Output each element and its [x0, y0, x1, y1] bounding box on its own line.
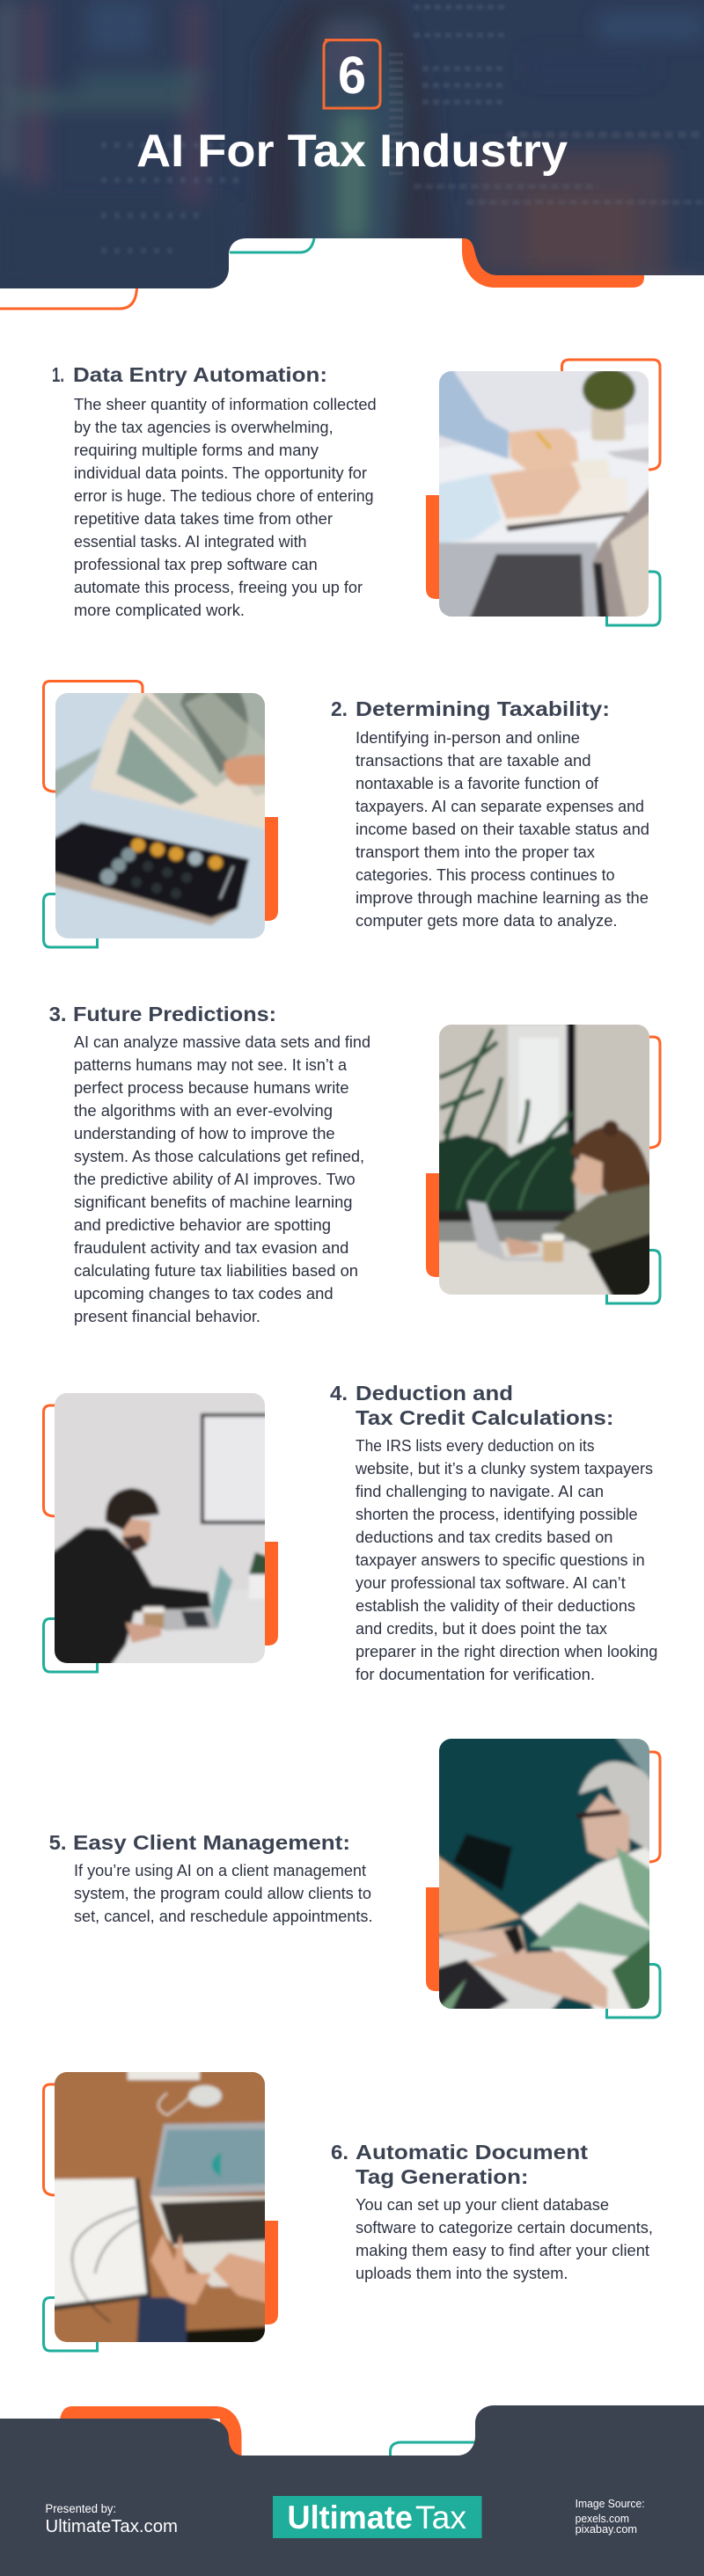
heading 5: 5. — [49, 1831, 67, 1854]
body text 2: computer gets more data to analyze. — [356, 912, 618, 930]
body text 5 — [74, 1862, 373, 1925]
heading 6: 6. — [331, 2141, 348, 2164]
frame: orange bar — [265, 2221, 278, 2324]
photo: older woman typing — [439, 1739, 649, 2009]
body text 3: patterns humans may not see. It isn’t a — [74, 1056, 348, 1074]
body text 2: taxpayers. AI can separate expenses and — [356, 798, 644, 815]
footer — [0, 2405, 704, 2576]
body text 1: The sheer quantity of information collected — [74, 396, 377, 413]
panel: 6 automatic document tag generation — [44, 2064, 653, 2351]
body text 6: uploads them into the system. — [356, 2265, 568, 2282]
body text 1: more complicated work. — [74, 602, 245, 619]
body text 1: essential tasks. AI integrated with — [74, 533, 306, 551]
image source: pexels.com — [576, 2512, 629, 2525]
photo: laptop on wooden desk — [55, 2072, 265, 2342]
body text 4: your professional tax software. AI can’t — [356, 1574, 626, 1592]
frame: teal outline — [44, 2297, 97, 2351]
body text 1: by the tax agencies is overwhelming, — [74, 419, 334, 436]
heading 2: 2. — [331, 697, 348, 720]
body text 4: shorten the process, identifying possible — [356, 1506, 637, 1523]
heading 3: Future Predictions: — [73, 1003, 276, 1025]
body text 3: calculating future tax liabilities based on — [74, 1262, 358, 1280]
panel: 1 data entry automation — [52, 360, 660, 625]
frame: orange bar — [426, 495, 439, 599]
frame: orange bar — [265, 817, 278, 921]
body text 3 — [74, 1033, 370, 1325]
body text 2: transport them into the proper tax — [356, 843, 595, 861]
body text 6: You can set up your client database — [356, 2196, 609, 2214]
panel: 2 determining taxability — [44, 673, 649, 947]
image source: Image Source: — [576, 2497, 645, 2510]
heading 6 — [331, 2141, 588, 2188]
frame: orange outline — [561, 360, 660, 470]
frame: orange outline — [44, 2084, 55, 2195]
body text 2 — [356, 729, 649, 930]
header banner — [0, 0, 704, 309]
heading 4: Deduction and — [356, 1382, 513, 1405]
photo: hands writing at laptop — [439, 371, 649, 617]
photo: cash and calculator phone — [55, 693, 265, 938]
logo: UltimateTax: Tax — [415, 2499, 467, 2536]
accent: teal line — [230, 238, 314, 252]
badge: number 6 — [324, 40, 380, 108]
panel: 5 easy client management — [49, 1731, 660, 2018]
body text 6: software to categorize certain documents, — [356, 2219, 653, 2237]
body text 3: understanding of how to improve the — [74, 1125, 335, 1142]
heading 2: Determining Taxability: — [356, 697, 610, 720]
body text 3: fraudulent activity and tax evasion and — [74, 1239, 348, 1257]
body text 4: preparer in the right direction when looking — [356, 1643, 657, 1660]
frame: orange outline — [649, 1037, 660, 1148]
body text 2: categories. This process continues to — [356, 866, 614, 884]
body text 1 — [74, 396, 377, 619]
frame: orange bar — [426, 1887, 439, 1991]
body text 4: taxpayer answers to specific questions in — [356, 1551, 645, 1569]
body text 3: system. As those calculations get refined, — [74, 1148, 364, 1165]
body text 4: The IRS lists every deduction on its — [356, 1437, 595, 1455]
frame: orange outline — [44, 1405, 55, 1516]
header background photo — [0, 0, 704, 299]
presented by: UltimateTax.com — [46, 2517, 178, 2536]
presented by — [46, 2502, 178, 2536]
body text 5: If you’re using AI on a client management — [74, 1862, 366, 1879]
body text 1: error is huge. The tedious chore of entering — [74, 487, 373, 505]
footer accent: teal line — [391, 2442, 480, 2457]
body text 1: requiring multiple forms and many — [74, 441, 319, 459]
body text 4: website, but it’s a clunky system taxpayers — [355, 1460, 653, 1478]
frame: teal outline — [44, 894, 97, 947]
body text 5: system, the program could allow clients to — [74, 1885, 371, 1902]
heading 6: Automatic Document — [356, 2141, 588, 2164]
frame: orange outline — [44, 681, 143, 792]
body text 2: income based on their taxable status and — [356, 821, 649, 838]
heading 3: 3. — [49, 1003, 67, 1025]
panel: 3 future predictions — [49, 1003, 660, 1325]
body text 1: professional tax prep software can — [74, 556, 318, 573]
body text 4: deductions and tax credits based on — [356, 1529, 612, 1546]
image source: pixabay.com — [576, 2522, 637, 2536]
heading 4: 4. — [330, 1382, 348, 1405]
body text 2: improve through machine learning as the — [356, 889, 649, 907]
body text 2: Identifying in-person and online — [356, 729, 580, 747]
body text 4: find challenging to navigate. AI can — [356, 1483, 604, 1500]
body text 4: establish the validity of their deductions — [356, 1597, 635, 1615]
panel: 4 deduction and tax credit — [44, 1382, 657, 1683]
body text 3: AI can analyze massive data sets and find — [74, 1033, 370, 1051]
body text 3: the predictive ability of AI improves. Two — [74, 1171, 356, 1188]
frame: teal outline — [44, 1618, 97, 1672]
body text 4 — [355, 1437, 657, 1683]
image source — [576, 2497, 645, 2536]
body text 3: present financial behavior. — [74, 1308, 260, 1325]
frame: orange bar — [426, 1173, 439, 1277]
frame: teal outline — [607, 1251, 660, 1303]
presented by: Presented by: — [46, 2502, 116, 2515]
heading 4 — [330, 1382, 614, 1429]
body text 6 — [356, 2196, 653, 2282]
body text 3: significant benefits of machine learning — [74, 1193, 352, 1211]
frame: teal outline — [607, 572, 660, 625]
body text 1: repetitive data takes time from other — [74, 510, 333, 528]
footer accent: orange tab — [60, 2406, 241, 2458]
logo: UltimateTax — [273, 2496, 482, 2538]
photo: woman working at desk — [439, 1025, 649, 1295]
heading 5: Easy Client Management: — [73, 1831, 350, 1854]
body text 2: nontaxable is a favorite function of — [356, 775, 599, 792]
accent: orange line — [0, 288, 137, 309]
frame: teal outline — [607, 1965, 660, 2018]
body text 1: individual data points. The opportunity for — [74, 464, 367, 482]
body text 3: the algorithms with an ever-evolving — [74, 1102, 333, 1120]
heading 4: Tax Credit Calculations: — [356, 1406, 614, 1429]
logo: UltimateTax: Ultimate — [287, 2499, 413, 2536]
body text 3: upcoming changes to tax codes and — [74, 1285, 334, 1303]
accent: orange band — [462, 238, 644, 288]
body text 3: perfect process because humans write — [74, 1079, 348, 1097]
frame: orange outline — [649, 1752, 660, 1862]
body text 3: and predictive behavior are spotting — [74, 1216, 331, 1234]
badge: number 6: 6 — [338, 46, 366, 105]
body text 4: and credits, but it does point the tax — [356, 1620, 607, 1638]
heading 1: 1. — [52, 363, 64, 386]
footer background — [0, 2405, 704, 2576]
body text 4: for documentation for verification. — [356, 1666, 595, 1683]
body text 1: automate this process, freeing you up for — [74, 579, 363, 596]
body text 6: making them easy to find after your client — [356, 2242, 649, 2259]
title: AI For Tax Industry — [136, 126, 568, 177]
body text 2: transactions that are taxable and — [356, 752, 591, 770]
heading 1: Data Entry Automation: — [73, 363, 327, 386]
body text 5: set, cancel, and reschedule appointments. — [74, 1908, 373, 1925]
photo: man at laptop — [55, 1393, 265, 1663]
frame: orange bar — [265, 1542, 278, 1646]
heading 6: Tag Generation: — [356, 2165, 528, 2188]
